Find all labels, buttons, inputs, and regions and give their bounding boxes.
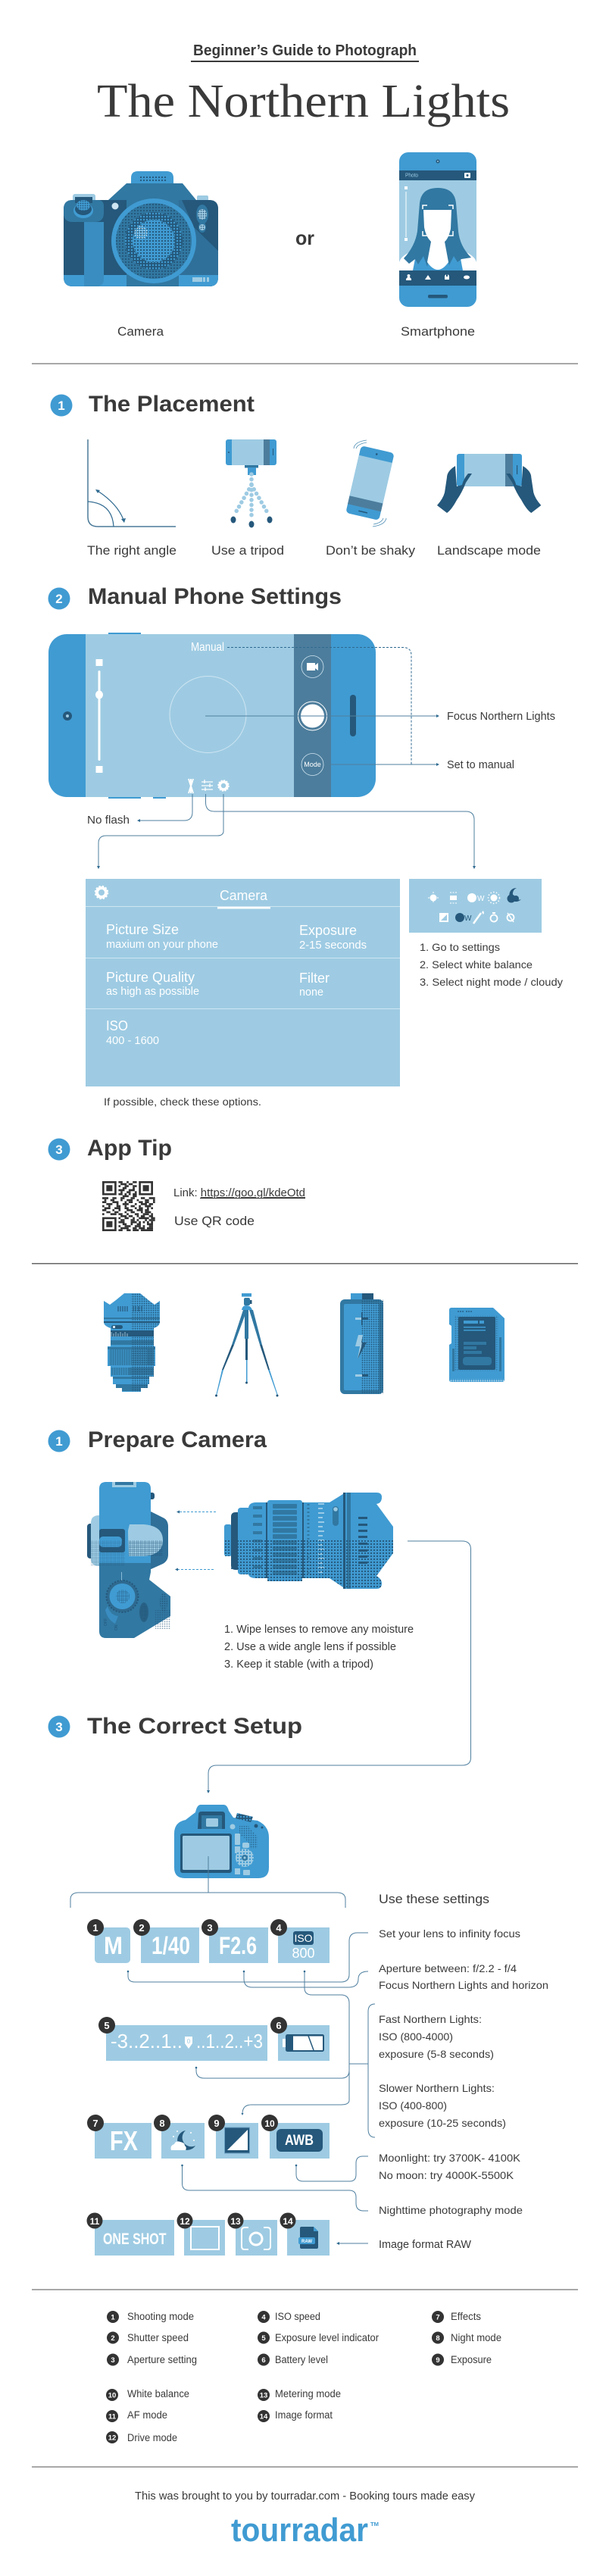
legend: Shooting mode	[127, 2311, 194, 2322]
icon: telephoto lens	[104, 1293, 160, 1392]
list: prepare steps: 2. Use a wide angle lens if possible	[224, 1641, 396, 1653]
heading: manual phone settings: Manual Phone Settings	[88, 584, 342, 609]
callout lines: settings	[127, 1933, 375, 2243]
notes: moonlight: Moonlight: try 3700K- 4100K	[379, 2152, 521, 2164]
subtitle: Beginner’s Guide to Photograph	[193, 42, 417, 59]
list: white balance steps	[420, 941, 563, 988]
panel: camera settings: none	[299, 986, 323, 999]
panel: camera settings: Picture Size	[106, 922, 179, 937]
icon: lens	[224, 1493, 393, 1589]
legend: Exposure	[451, 2354, 492, 2365]
label: camera: Camera	[117, 324, 164, 339]
notes: fast and slower lights	[379, 2013, 506, 2129]
notes: fast and slower lights: ISO (800-4000)	[379, 2030, 453, 2043]
row: settings 5-6	[98, 2017, 330, 2061]
heading: prepare camera: Prepare Camera	[88, 1427, 267, 1452]
legend: ISO speed	[275, 2311, 320, 2322]
icon: camera	[64, 171, 218, 286]
panel: white balance icons: W	[477, 895, 485, 903]
legend: Effects	[451, 2311, 481, 2322]
notes: fast and slower lights: Slower Northern Lights:	[379, 2082, 495, 2094]
panel: camera settings: 2-15 seconds	[299, 939, 367, 952]
legend: Image format	[275, 2409, 333, 2421]
panel: camera settings: Picture Quality	[106, 970, 195, 985]
setting: shooting mode: 1	[92, 1922, 98, 1934]
panel: white balance icons: W	[464, 914, 472, 923]
link text: Link: https://goo.gl/kdeOtd	[173, 1187, 305, 1199]
icon: camera back	[174, 1805, 269, 1878]
legend: 9	[436, 2356, 440, 2365]
icon: landscape hands	[437, 454, 541, 513]
setting: metering mode: 13	[230, 2216, 241, 2227]
setting: effects: FX	[110, 2125, 138, 2156]
setting: image format: 14	[283, 2216, 293, 2227]
logo: tourradar: tourradar	[231, 2512, 368, 2549]
icon: tripod	[215, 1293, 279, 1397]
note: nighttime: Nighttime photography mode	[379, 2204, 523, 2216]
legend: 14	[260, 2412, 268, 2421]
legend: 2	[111, 2334, 115, 2343]
setting: metering mode	[227, 2212, 277, 2256]
label: smartphone: Smartphone	[401, 324, 475, 339]
setting: af mode: ONE SHOT	[103, 2231, 167, 2248]
label: landscape: Landscape mode	[437, 543, 541, 558]
legend	[106, 2311, 501, 2443]
footer credit: This was brought to you by tourradar.com - Booking tours made easy	[135, 2490, 475, 2503]
heading: app tip	[48, 1136, 172, 1161]
legend: 5	[261, 2334, 266, 2343]
setting: exposure	[208, 2115, 258, 2159]
setting: white balance	[261, 2115, 330, 2159]
setting: aperture	[201, 1919, 268, 1963]
icon: gear	[95, 886, 108, 899]
setting: drive mode	[177, 2212, 225, 2256]
legend: Aperture setting	[127, 2354, 197, 2365]
heading: app tip: 3	[55, 1143, 63, 1157]
notes: moonlight	[379, 2152, 521, 2181]
title: The Northern Lights	[97, 76, 510, 127]
big phone diagram	[48, 633, 376, 799]
connector: lens to setup	[208, 1541, 471, 1793]
setting: shutter speed	[133, 1919, 199, 1963]
list: prepare steps: 3. Keep it stable (with a tripod)	[224, 1658, 373, 1671]
notes: set lens and aperture: Aperture between: f/2.2 - f/4	[379, 1962, 517, 1974]
panel: camera settings: Camera	[220, 888, 268, 903]
label: use these settings: Use these settings	[379, 1892, 489, 1906]
setting: iso: ISO	[294, 1932, 313, 1944]
legend: Drive mode	[127, 2432, 177, 2443]
icon: camera side view: ON	[114, 1624, 119, 1630]
setting: white balance: AWB	[285, 2133, 314, 2149]
setting: iso: 800	[292, 1946, 315, 1961]
legend: 11	[108, 2412, 117, 2421]
legend: Battery level	[275, 2354, 328, 2365]
setting: night mode: 8	[159, 2118, 165, 2129]
setting: shutter speed: 1/40	[152, 1932, 190, 1959]
legend: Metering mode	[275, 2388, 341, 2399]
setting: exposure level: -3..2..1..	[111, 2030, 183, 2052]
legend: Shutter speed	[127, 2332, 189, 2343]
row: settings 11-14	[86, 2212, 330, 2256]
icon: smartphone: Photo	[405, 173, 418, 179]
setting: af mode: 11	[90, 2216, 100, 2227]
note: image format raw: Image format RAW	[379, 2239, 471, 2251]
legend: 12	[108, 2434, 116, 2443]
mode button: Mode	[304, 761, 321, 768]
label: no flash: No flash	[87, 814, 130, 827]
legend: 10	[108, 2391, 116, 2400]
row: settings 1-4	[87, 1919, 330, 1963]
setting: battery level: 6	[276, 2020, 282, 2031]
notes: set lens and aperture: Set your lens to infinity focus	[379, 1927, 520, 1940]
setting: effects: 7	[92, 2118, 98, 2129]
setting: effects	[87, 2115, 152, 2159]
heading: the placement: The Placement	[89, 392, 255, 417]
notes: set lens and aperture	[379, 1927, 548, 1991]
setting: exposure level: 0	[187, 2038, 191, 2045]
label: shaky: Don’t be shaky	[326, 543, 416, 558]
setting: shooting mode: M	[104, 1932, 123, 1959]
setting: af mode	[86, 2212, 174, 2256]
panel: camera settings: ISO	[106, 1018, 128, 1033]
setting: exposure level: 5	[104, 2020, 110, 2031]
label: tripod: Use a tripod	[211, 543, 284, 558]
setting: drive mode: 12	[180, 2216, 190, 2227]
heading: manual phone settings: 2	[55, 592, 63, 606]
setting: image format	[280, 2212, 330, 2256]
settings bracket	[70, 1856, 345, 1908]
setting: iso: 4	[276, 1922, 282, 1934]
callout lines: phone	[98, 647, 474, 868]
setting: white balance: 10	[264, 2118, 275, 2129]
notes: fast and slower lights: exposure (10-25 seconds)	[379, 2117, 506, 2129]
heading: the correct setup: 3	[55, 1720, 63, 1734]
logo: tourradar: TM	[370, 2522, 379, 2528]
setting: iso	[270, 1919, 330, 1963]
panel: camera settings: as high as possible	[106, 986, 199, 998]
legend: White balance	[127, 2388, 189, 2399]
heading: prepare camera: 1	[55, 1434, 63, 1449]
icon: sd card	[449, 1308, 504, 1382]
setting: aperture: F2.6	[219, 1932, 257, 1959]
label: set to manual: Set to manual	[447, 758, 514, 771]
icon: tripod with phone	[226, 439, 276, 527]
use qr code: Use QR code	[174, 1215, 255, 1228]
manual label: Manual	[191, 641, 224, 654]
notes: set lens and aperture: Focus Northern Lights and horizon	[379, 1979, 548, 1991]
icon: camera side view: OFF	[104, 1618, 108, 1626]
qr code	[102, 1181, 155, 1231]
list: prepare steps	[224, 1624, 414, 1671]
video button	[301, 656, 323, 677]
icon: smartphone	[399, 152, 476, 307]
notes: fast and slower lights: ISO (400-800)	[379, 2099, 447, 2112]
setting: image format: RAW	[301, 2240, 312, 2244]
legend: 13	[260, 2391, 267, 2400]
setting: exposure: 9	[214, 2118, 220, 2129]
shutter button	[298, 702, 327, 730]
setting: aperture: 3	[207, 1922, 213, 1934]
heading: the placement: 1	[58, 399, 65, 413]
notes: fast and slower lights: exposure (5-8 seconds)	[379, 2048, 494, 2060]
label: focus northern lights: Focus Northern Lights	[447, 710, 555, 723]
legend: 4	[261, 2314, 266, 2321]
legend: Exposure level indicator	[275, 2332, 379, 2343]
list: white balance steps: 1. Go to settings	[420, 941, 500, 953]
icon: battery	[340, 1293, 383, 1394]
setting: battery level	[270, 2017, 330, 2061]
heading: app tip: App Tip	[87, 1136, 172, 1161]
panel: camera settings: maxium on your phone	[106, 939, 218, 951]
panel: camera settings	[86, 879, 400, 1086]
icon: camera side view	[87, 1482, 170, 1638]
panel: camera settings: Filter	[299, 971, 330, 986]
legend: 6	[261, 2356, 266, 2365]
legend: Night mode	[451, 2332, 501, 2343]
list: white balance steps: 3. Select night mode / cloudy	[420, 976, 563, 988]
panel: white balance icons	[409, 879, 542, 933]
icon: right angle	[88, 439, 176, 527]
setting: exposure level	[98, 2017, 267, 2061]
panel: camera settings: Exposure	[299, 923, 357, 938]
icon: shaky phone	[345, 440, 395, 527]
notes: moonlight: No moon: try 4000K-5500K	[379, 2169, 514, 2181]
legend: 3	[111, 2356, 115, 2365]
legend: AF mode	[127, 2409, 167, 2421]
heading: the correct setup: The Correct Setup	[87, 1714, 302, 1739]
or: or	[295, 227, 314, 249]
legend: 7	[436, 2314, 440, 2321]
note: check options: If possible, check these options.	[104, 1096, 261, 1108]
legend: 8	[436, 2334, 440, 2343]
arrows: lens to camera	[176, 1512, 216, 1570]
mode button	[301, 753, 323, 776]
setting: exposure level: ..1..2..+3	[196, 2030, 263, 2052]
list: prepare steps: 1. Wipe lenses to remove any moisture	[224, 1624, 414, 1636]
setting: shutter speed: 2	[139, 1922, 145, 1934]
legend: 1	[111, 2314, 115, 2321]
setting: shooting mode	[87, 1919, 130, 1963]
notes: fast and slower lights: Fast Northern Lights:	[379, 2013, 482, 2025]
list: white balance steps: 2. Select white balance	[420, 958, 533, 971]
label: right angle: The right angle	[87, 543, 176, 558]
panel: camera settings: 400 - 1600	[106, 1035, 159, 1047]
icons: flash, sliders, gear	[189, 779, 229, 793]
setting: night mode	[154, 2115, 205, 2159]
row: settings 7-10	[87, 2115, 330, 2159]
